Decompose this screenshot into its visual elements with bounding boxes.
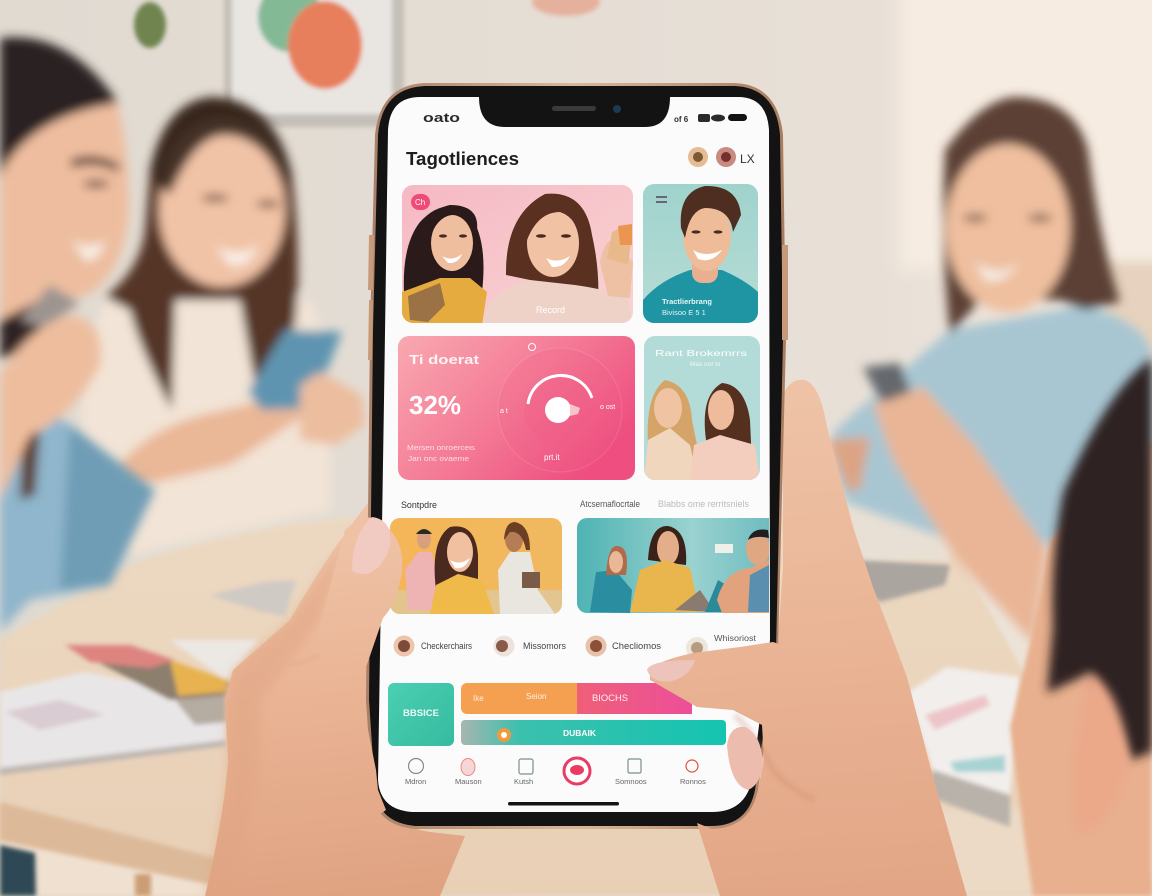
card: teal two women: [644, 336, 760, 480]
right hand front fingers: [647, 642, 880, 896]
card: pink two women: Record: [536, 305, 565, 315]
thumb with nail: [650, 642, 880, 896]
tag: [411, 194, 430, 210]
woman centre: [430, 526, 494, 614]
avatar item 4: Whisoriost: [714, 633, 757, 643]
card caption: [407, 445, 476, 463]
centre woman: [482, 194, 633, 325]
nav item 2: [455, 758, 482, 786]
dial gauge: a t: [500, 408, 508, 415]
phone screen: [378, 97, 770, 812]
nav item 1: [405, 758, 426, 786]
teal gradient bar: DUBAIK: [563, 728, 597, 738]
card: teal man: [643, 184, 758, 323]
nav item 5: Somnoos: [615, 777, 647, 786]
nav item 2: Mauson: [455, 777, 482, 786]
avatar item 1: [394, 636, 472, 656]
books and papers on table: [0, 500, 1020, 827]
home indicator: [508, 802, 619, 806]
shadow beneath thumb: [735, 715, 815, 800]
nav item 6: [680, 760, 706, 786]
card caption: Mersen onroerceis: [407, 445, 476, 452]
audience avatars row: [394, 633, 757, 659]
left hand holding phone: [205, 498, 465, 896]
card: teal man: Tractlierbrang: [662, 297, 712, 306]
section heading centre: Atcsernaflocrtale: [580, 499, 640, 509]
nav item 6: Ronnos: [680, 777, 706, 786]
app title: Tagotliences: [406, 149, 519, 169]
card: pink two women: Ch: [415, 198, 425, 207]
section heading left: Sontpdre: [401, 500, 437, 511]
notch with speaker and camera: [479, 97, 670, 127]
nav item 3: Kutsh: [514, 777, 533, 786]
teal square tile: [388, 683, 454, 746]
phone body frame: [366, 83, 786, 829]
status bar time: oato: [423, 111, 461, 125]
card: teal man: Bivisoo E 5 1: [662, 308, 706, 317]
card: teal two women: Mas nor ts: [690, 361, 721, 368]
woman right: [498, 522, 555, 614]
person: foreground right dark hair and cheek: [1010, 358, 1152, 896]
avatar item 3: Checliomos: [612, 641, 662, 651]
table: [0, 510, 1152, 896]
avatar item 2: [494, 636, 566, 656]
status bar icons: of 6: [674, 115, 689, 124]
side buttons: [368, 235, 788, 360]
wall art: framed picture and plant: [134, 0, 600, 127]
orange and pink bar: [461, 683, 692, 714]
header avatars: LX: [740, 152, 755, 166]
left woman: [402, 205, 487, 325]
person: woman far left: [0, 37, 155, 632]
dial gauge: o ost: [600, 404, 615, 411]
avatar item 2: Missomors: [523, 641, 566, 651]
teal gradient bar: [461, 720, 726, 745]
dial gauge: [498, 344, 622, 472]
header avatars: [688, 147, 755, 167]
person: woman in cream sweater: [80, 97, 365, 555]
card caption: Jan onc ovaeme: [408, 456, 469, 463]
orange and pink bar: BIOCHS: [592, 693, 628, 703]
orange and pink bar: Seion: [526, 692, 546, 701]
person: woman on right in blue sweater: [827, 97, 1152, 643]
dial gauge: prt.it: [544, 453, 560, 462]
phone black bezel: [369, 86, 783, 826]
card: pink stat dial: [398, 336, 635, 480]
nav item 5: [615, 759, 647, 786]
right hand behind phone: index finger and palm: [673, 380, 967, 896]
thumb nail: [647, 660, 695, 682]
nav item 1: Mdron: [405, 777, 426, 786]
card heading: Ti doerat: [409, 352, 480, 367]
avatar item 4: [686, 633, 757, 659]
teal square tile: BBSICE: [403, 708, 439, 718]
card: teal group: [577, 518, 770, 614]
orange and pink bar: Ike: [473, 694, 484, 703]
bottom navigation bar: [405, 758, 706, 786]
avatar item 1: Checkerchairs: [421, 641, 472, 651]
phone: [366, 83, 788, 829]
left thumb over phone with nail: [290, 517, 402, 835]
card: pink two women: [402, 185, 633, 325]
status bar icons: [674, 114, 747, 124]
nav centre button: [564, 758, 590, 784]
section heading right: Blabbs ome rerritsniels: [658, 499, 749, 509]
big percent: 32%: [409, 390, 461, 420]
card: teal two women: Rant Brokemrrs: [655, 348, 747, 358]
avatar item 3: [586, 636, 662, 656]
man left: [405, 529, 438, 610]
curled finger with nail: [727, 727, 763, 790]
card: yellow group: [390, 518, 562, 614]
nav item 3: [514, 759, 533, 786]
